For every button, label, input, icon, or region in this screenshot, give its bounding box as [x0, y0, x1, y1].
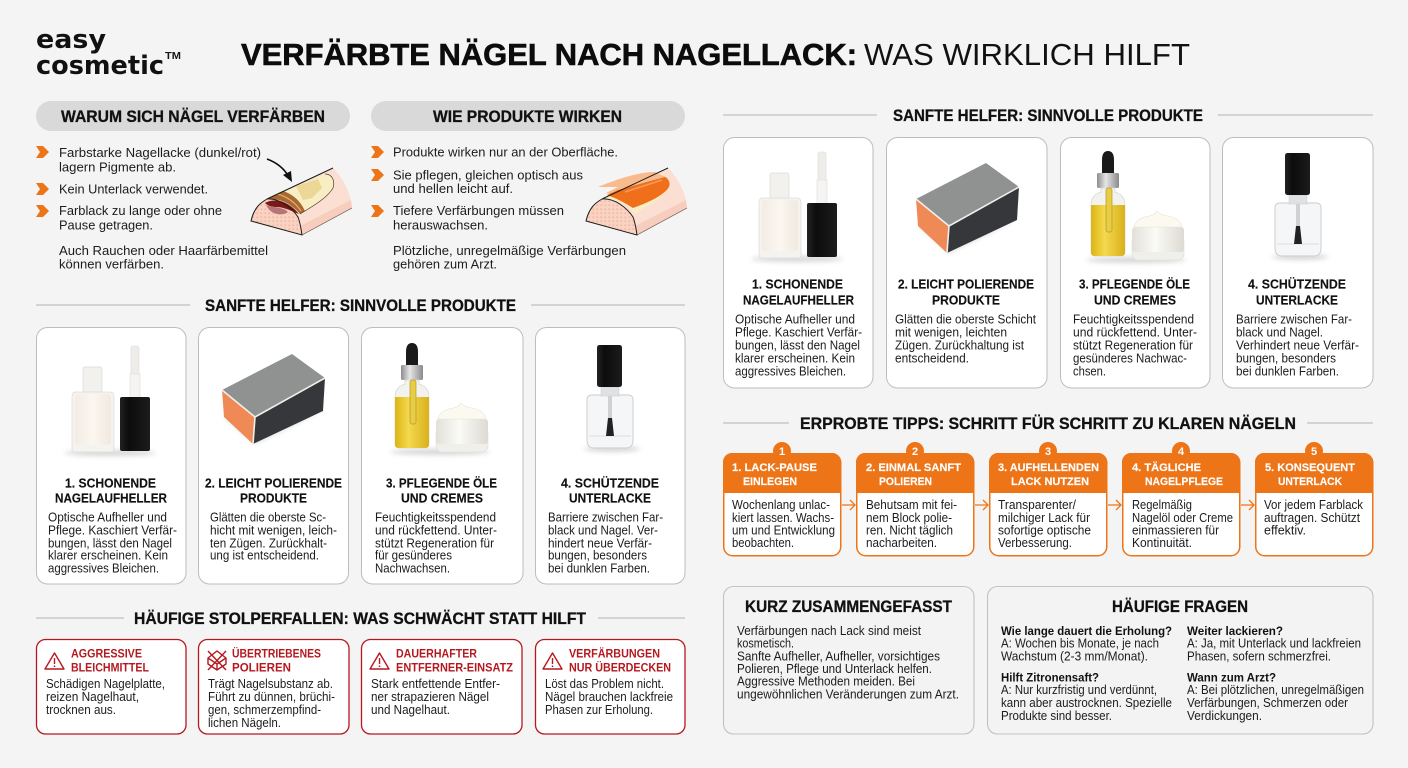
text: titel und beschreibung: bei dunklen Farben.	[1236, 364, 1339, 378]
text: titel und beschreibung: ten Zügen. Zurückhalt-	[210, 536, 327, 550]
text: titel und beschreibung: Optische Aufheller und	[735, 312, 855, 326]
text: titel und beschreibung: und rückfettend. Unter-	[375, 524, 497, 538]
faq: weiter lackieren: Phasen, sofern schmerzfrei.	[1187, 650, 1331, 664]
icon: polierblock	[222, 354, 325, 444]
icon: öl und creme	[390, 343, 490, 455]
text: titel und beschreibung	[735, 278, 862, 378]
text: titel und beschreibung: Verhindert neue Verfär-	[1236, 338, 1359, 352]
text: titel und beschreibung: PRODUKTE	[932, 294, 1000, 308]
panel: schritt 3: Verbesserung.	[998, 536, 1072, 550]
bullet list: wirkung: Plötzliche, unregelmäßige Verfärbungen	[393, 244, 626, 258]
text: titel und beschreibung: stützt Regeneration für	[1073, 338, 1193, 352]
panel: schritt 3: sofortige optische	[998, 524, 1091, 538]
text: entferner: Stark entfettende Entfer-	[371, 677, 500, 691]
text: zusammenfassung	[737, 624, 959, 702]
panel: schritt 4: einmassieren für	[1132, 524, 1219, 538]
text: titel und beschreibung: hicht mit wenigen, leich-	[210, 524, 337, 538]
panel: warnung polieren	[198, 640, 349, 734]
text: titel und beschreibung: 3. PFLEGENDE ÖLE	[1079, 276, 1190, 292]
icon: nagelaufheller flasche	[64, 346, 156, 456]
text: titel und beschreibung: gesünderes Nachwac-	[1073, 352, 1187, 366]
faq: zitronensaft: A: Nur kurzfristig und verdünnt,	[1001, 683, 1157, 697]
text: titel und beschreibung: Feuchtigkeitsspendend	[1073, 312, 1194, 326]
heading: wie	[371, 101, 685, 131]
text: titel und beschreibung: bungen, lässt den Nagel	[48, 536, 172, 550]
title	[241, 38, 1190, 72]
arrow: schritt 2 zu 3	[975, 500, 988, 510]
bullet list: ursachen: Farblack zu lange oder ohne	[59, 204, 222, 218]
text: polieren: lichen Nägeln.	[208, 716, 281, 730]
heading: sanfte helfer links: SANFTE HELFER: SINNVOLLE PRODUKTE	[205, 296, 516, 315]
bullet list: wirkung: Tiefere Verfärbungen müssen	[393, 204, 564, 218]
bullet list: ursachen: lagern Pigmente ab.	[59, 160, 176, 174]
panel: warnung überdecken	[536, 640, 685, 734]
panel: schritt 1: 1	[779, 446, 785, 458]
panel: schritt 1	[723, 442, 841, 556]
text: polieren	[208, 646, 335, 730]
panel: schritt 5: 5	[1311, 446, 1317, 458]
text: titel und beschreibung: klarer erscheinen. Kein	[48, 548, 168, 562]
text: titel und beschreibung: Barriere zwischen Far-	[1236, 312, 1352, 326]
bullet list: wirkung	[371, 146, 626, 272]
panel: wie produkte wirken	[371, 101, 687, 272]
text: titel und beschreibung	[205, 476, 342, 562]
panel: warum sich nägel verfärben	[36, 101, 352, 272]
faq: weiter lackieren: A: Ja, mit Unterlack und lackfreien	[1187, 636, 1361, 650]
text: titel und beschreibung: 4. SCHÜTZENDE	[561, 476, 659, 490]
icon: unterlack flasche	[584, 345, 640, 452]
text: titel und beschreibung	[548, 476, 663, 576]
text: titel und beschreibung: Nachwachsen.	[375, 562, 450, 576]
text: zusammenfassung: kosmetisch.	[737, 636, 794, 650]
text: zusammenfassung: Polieren, Pflege und Unterlack helfen.	[737, 662, 932, 676]
panel: schritt 1: Wochenlang unlac-	[732, 498, 830, 512]
icon: nagelaufheller flasche	[751, 152, 843, 262]
bullet list: ursachen: Auch Rauchen oder Haarfärbemittel	[59, 244, 268, 258]
logo: easy	[36, 25, 106, 55]
faq: erholung: A: Wochen bis Monate, je nach	[1001, 636, 1159, 650]
text: titel und beschreibung: Pflege. Kaschiert Verfär-	[735, 326, 862, 340]
faq: wann zum arzt: Verfärbungen, Schmerzen oder	[1187, 696, 1348, 710]
panel: schritt 3: 3	[1045, 446, 1051, 458]
text: titel und beschreibung: Optische Aufheller und	[48, 510, 167, 524]
heading: wie: WIE PRODUKTE WIRKEN	[433, 107, 622, 126]
text: titel und beschreibung	[895, 278, 1036, 366]
faq: zitronensaft	[1001, 670, 1172, 723]
bullet list: wirkung: gehören zum Arzt.	[393, 258, 497, 272]
panel: schritt 3: milchiger Lack für	[998, 511, 1090, 525]
text: polieren: POLIEREN	[232, 660, 291, 674]
panel: produktkarte 1 links	[36, 328, 186, 584]
bullet list: ursachen	[36, 146, 268, 272]
bullet list: ursachen: Pause getragen.	[59, 218, 153, 232]
faq: wann zum arzt: A: Bei plötzlichen, unregelmäßigen	[1187, 683, 1364, 697]
text: titel und beschreibung: UND CREMES	[401, 492, 483, 506]
bullet list: ursachen: können verfärben.	[59, 258, 164, 272]
text: entferner: und Nagelhaut.	[371, 703, 450, 717]
icon: nagel mit orangem film	[586, 168, 687, 235]
bullet list: wirkung: herauswachsen.	[393, 218, 488, 232]
panel: schritt 2: 2. EINMAL SANFT	[866, 462, 961, 474]
heading: warum: WARUM SICH NÄGEL VERFÄRBEN	[61, 107, 325, 126]
text: titel und beschreibung	[1236, 276, 1359, 378]
text: entferner: DAUERHAFTER	[396, 646, 477, 660]
text: zusammenfassung: Sanfte Aufheller, Aufheller, vorsichtiges	[737, 650, 940, 664]
text: polieren: Trägt Nagelsubstanz ab.	[208, 677, 333, 691]
panel: schritt 4: Kontinuität.	[1132, 536, 1192, 550]
text: bleichmittel: trocknen aus.	[46, 703, 116, 717]
text: titel und beschreibung: NAGELAUFHELLER	[55, 492, 167, 506]
panel: warnung bleichmittel	[36, 640, 186, 734]
icon: öl und creme	[1086, 151, 1186, 263]
faq: weiter lackieren: Weiter lackieren?	[1187, 624, 1283, 638]
text: titel und beschreibung: chsen.	[1073, 364, 1106, 378]
faq: zitronensaft: Produkte sind besser.	[1001, 709, 1112, 723]
icon: unterlack flasche	[1272, 153, 1328, 260]
arrow: schritt 3 zu 4	[1108, 500, 1121, 510]
text: titel und beschreibung: bei dunklen Farben.	[548, 562, 650, 576]
text: titel und beschreibung	[1073, 276, 1197, 378]
bullet list: wirkung: und hellen leicht auf.	[393, 182, 513, 196]
panel: schritt 2: 2	[912, 446, 918, 458]
text: titel und beschreibung: Glätten die oberste Schicht	[895, 312, 1036, 326]
bullet list: wirkung: Produkte wirken nur an der Oberfläche.	[393, 146, 618, 160]
panel: produktkarte 1 rechts	[724, 138, 873, 388]
panel: warnung entferner	[362, 640, 522, 734]
panel: schritt 3: LACK NUTZEN	[1011, 476, 1089, 488]
text: entferner: ENTFERNER-EINSATZ	[396, 660, 513, 674]
text: entferner: ner strapazieren Nägel	[371, 690, 489, 704]
panel: schritt 4: Nagelöl oder Creme	[1132, 511, 1233, 525]
text: überdecken: Phasen zur Erholung.	[545, 703, 653, 717]
panel: produktkarte 3 links	[362, 328, 523, 584]
text: überdecken: VERFÄRBUNGEN	[569, 646, 660, 660]
heading: fragen: HÄUFIGE FRAGEN	[1112, 597, 1248, 616]
text: titel und beschreibung: Barriere zwischen Far-	[548, 510, 663, 524]
faq: zitronensaft: Hilft Zitronensaft?	[1001, 670, 1099, 684]
panel: schritt 5: effektiv.	[1264, 524, 1306, 538]
panel: schritt 4	[1122, 442, 1240, 556]
panel: schritt 1: 1. LACK-PAUSE	[732, 462, 817, 474]
panel: produktkarte 3 rechts	[1060, 138, 1210, 388]
bullet list: wirkung: Sie pflegen, gleichen optisch aus	[393, 168, 583, 182]
icon: polierblock	[916, 163, 1019, 253]
text: titel und beschreibung: 2. LEICHT POLIERENDE	[898, 278, 1034, 292]
bullet list: ursachen: Farbstarke Nagellacke (dunkel/rot)	[59, 146, 261, 160]
text: bleichmittel	[46, 646, 165, 717]
panel: produktkarte 2 links	[198, 328, 348, 584]
panel: produktkarte 4 rechts	[1222, 138, 1373, 388]
icon: verfärbter nagel	[251, 168, 352, 235]
heading: zusammenfassung: KURZ ZUSAMMENGEFASST	[745, 597, 952, 616]
heading: erprobte tipps: ERPROBTE TIPPS: SCHRITT FÜR SCHRITT ZU KLAREN NÄGELN	[800, 414, 1296, 433]
arrow: schritt 4 zu 5	[1241, 500, 1254, 510]
text: polieren: ÜBERTRIEBENES	[232, 646, 321, 660]
text: überdecken: Nägel brauchen lackfreie	[545, 690, 673, 704]
text: titel und beschreibung: 3. PFLEGENDE ÖLE	[386, 476, 497, 490]
text: überdecken	[545, 646, 673, 717]
icon: durchgestrichener block	[208, 651, 226, 670]
text: titel und beschreibung: ung ist entscheidend.	[210, 548, 319, 562]
text: titel und beschreibung: mit wenigen, leichten	[895, 326, 1007, 340]
panel: schritt 5: Vor jedem Farblack	[1264, 498, 1364, 512]
text: titel und beschreibung: NAGELAUFHELLER	[743, 294, 854, 308]
text: zusammenfassung: Verfärbungen nach Lack sind meist	[737, 624, 921, 638]
text: titel und beschreibung: hindert neue Verfär-	[548, 536, 652, 550]
panel: produktkarte 2 rechts	[886, 138, 1047, 388]
text: titel und beschreibung: entscheidend.	[895, 352, 969, 366]
panel: schritt 1: kiert lassen. Wachs-	[732, 511, 834, 525]
text: polieren: gen, schmerzempfind-	[208, 703, 321, 717]
faq: wann zum arzt	[1187, 670, 1364, 723]
panel: schritt 2: nem Block polie-	[866, 511, 952, 525]
text: titel und beschreibung: für gesünderes	[375, 548, 452, 562]
text: titel und beschreibung: UNTERLACKE	[1256, 294, 1338, 308]
text: titel und beschreibung: Feuchtigkeitsspendend	[375, 510, 496, 524]
text: überdecken: NUR ÜBERDECKEN	[569, 660, 671, 674]
panel: schritt 4: 4. TÄGLICHE	[1132, 461, 1201, 474]
panel: schritt 5	[1255, 442, 1373, 556]
panel: schritt 1: beobachten.	[732, 536, 794, 550]
text: bleichmittel: AGGRESSIVE	[71, 646, 142, 660]
panel: schritt 3	[989, 442, 1107, 556]
panel: schritt 3: Transparenter/	[998, 498, 1076, 512]
text: überdecken: Löst das Problem nicht.	[545, 677, 664, 691]
panel: schritt 2: nacharbeiten.	[866, 536, 937, 550]
icon: warndreieck	[370, 653, 389, 669]
faq: erholung	[1001, 624, 1172, 664]
text: zusammenfassung: ungewöhnlichen Veränderungen zum Arzt.	[737, 688, 959, 702]
text: titel und beschreibung: UND CREMES	[1094, 294, 1176, 308]
text: titel und beschreibung: klarer erscheinen. Kein	[735, 352, 855, 366]
panel: schritt 4: 4	[1178, 446, 1185, 458]
icon: warndreieck	[45, 653, 64, 669]
text: polieren: Führt zu dünnen, brüchi-	[208, 690, 335, 704]
text: titel und beschreibung: black und Nagel. Ver-	[548, 524, 658, 538]
title: VERFÄRBTE NÄGEL NACH NAGELLACK:	[241, 38, 857, 72]
text: titel und beschreibung: PRODUKTE	[240, 492, 307, 506]
faq: wann zum arzt: Wann zum Arzt?	[1187, 670, 1276, 684]
panel: schritt 1: EINLEGEN	[743, 476, 797, 488]
logo: cosmetic	[36, 51, 164, 81]
text: titel und beschreibung: 2. LEICHT POLIERENDE	[205, 476, 342, 490]
panel: produktkarte 4 links	[536, 328, 685, 584]
text: zusammenfassung: Aggressive Methoden meiden. Bei	[737, 674, 915, 688]
panel: kurz zusammengefasst	[724, 586, 974, 734]
text: titel und beschreibung: bungen, lässt den Nagel	[735, 338, 860, 352]
panel: schritt 2: POLIEREN	[879, 476, 932, 488]
icon: warndreieck	[543, 653, 562, 669]
heading: sanfte helfer rechts: SANFTE HELFER: SINNVOLLE PRODUKTE	[893, 106, 1203, 125]
text: titel und beschreibung: bungen, besonders	[548, 548, 647, 562]
panel: schritt 2: ren. Nicht täglich	[866, 524, 953, 538]
text: titel und beschreibung: 4. SCHÜTZENDE	[1248, 276, 1346, 292]
text: titel und beschreibung	[48, 476, 177, 576]
text: entferner	[371, 646, 513, 717]
panel: schritt 5: UNTERLACK	[1278, 476, 1343, 488]
faq: zitronensaft: kann aber austrocknen. Spezielle	[1001, 696, 1172, 710]
text: titel und beschreibung: Glätten die oberste Sc-	[210, 510, 326, 524]
logo: TM	[165, 51, 181, 62]
bullet list: ursachen: Kein Unterlack verwendet.	[59, 182, 208, 196]
text: bleichmittel: reizen Nagelhaut,	[46, 690, 139, 704]
text: titel und beschreibung: aggressives Bleichen.	[48, 562, 159, 576]
panel: schritt 2	[856, 442, 974, 556]
faq: erholung: Wachstum (2-3 mm/Monat).	[1001, 650, 1148, 664]
text: titel und beschreibung: Pflege. Kaschiert Verfär-	[48, 524, 177, 538]
panel: schritt 3: 3. AUFHELLENDEN	[998, 462, 1099, 474]
text: bleichmittel: Schädigen Nagelplatte,	[46, 677, 165, 691]
title: WAS WIRKLICH HILFT	[864, 38, 1190, 72]
text: titel und beschreibung: 1. SCHONENDE	[752, 278, 843, 292]
text: bleichmittel: BLEICHMITTEL	[71, 660, 149, 674]
arrow: schritt 1 zu 2	[842, 500, 855, 510]
faq: weiter lackieren	[1187, 624, 1361, 664]
panel: schritt 4: Regelmäßig	[1132, 498, 1192, 512]
heading: häufige stolperfallen: HÄUFIGE STOLPERFALLEN: WAS SCHWÄCHT STATT HILFT	[134, 609, 586, 628]
faq: erholung: Wie lange dauert die Erholung?	[1001, 624, 1172, 638]
text: titel und beschreibung: Zügen. Zurückhaltung ist	[895, 338, 1024, 352]
text: titel und beschreibung	[375, 476, 497, 576]
text: titel und beschreibung: aggressives Bleichen.	[735, 364, 846, 378]
text: titel und beschreibung: bungen, besonders	[1236, 352, 1336, 366]
panel: schritt 5: 5. KONSEQUENT	[1265, 462, 1355, 474]
logo	[36, 25, 181, 81]
panel: schritt 4: NAGELPFLEGE	[1145, 476, 1223, 488]
text: titel und beschreibung: 1. SCHONENDE	[65, 476, 156, 490]
panel: häufige fragen	[988, 586, 1373, 734]
panel: schritt 1: um und Entwicklung	[732, 524, 835, 538]
faq: wann zum arzt: Verdickungen.	[1187, 709, 1262, 723]
text: titel und beschreibung: black und Nagel.	[1236, 326, 1323, 340]
panel: schritt 5: auftragen. Schützt	[1264, 511, 1360, 525]
text: titel und beschreibung: stützt Regeneration für	[375, 536, 494, 550]
panel: schritt 2: Behutsam mit fei-	[866, 498, 957, 512]
heading: warum	[36, 101, 350, 131]
text: titel und beschreibung: und rückfettend. Unter-	[1073, 326, 1197, 340]
text: titel und beschreibung: UNTERLACKE	[569, 492, 651, 506]
arrow: pigmente zum nagel	[267, 159, 292, 182]
